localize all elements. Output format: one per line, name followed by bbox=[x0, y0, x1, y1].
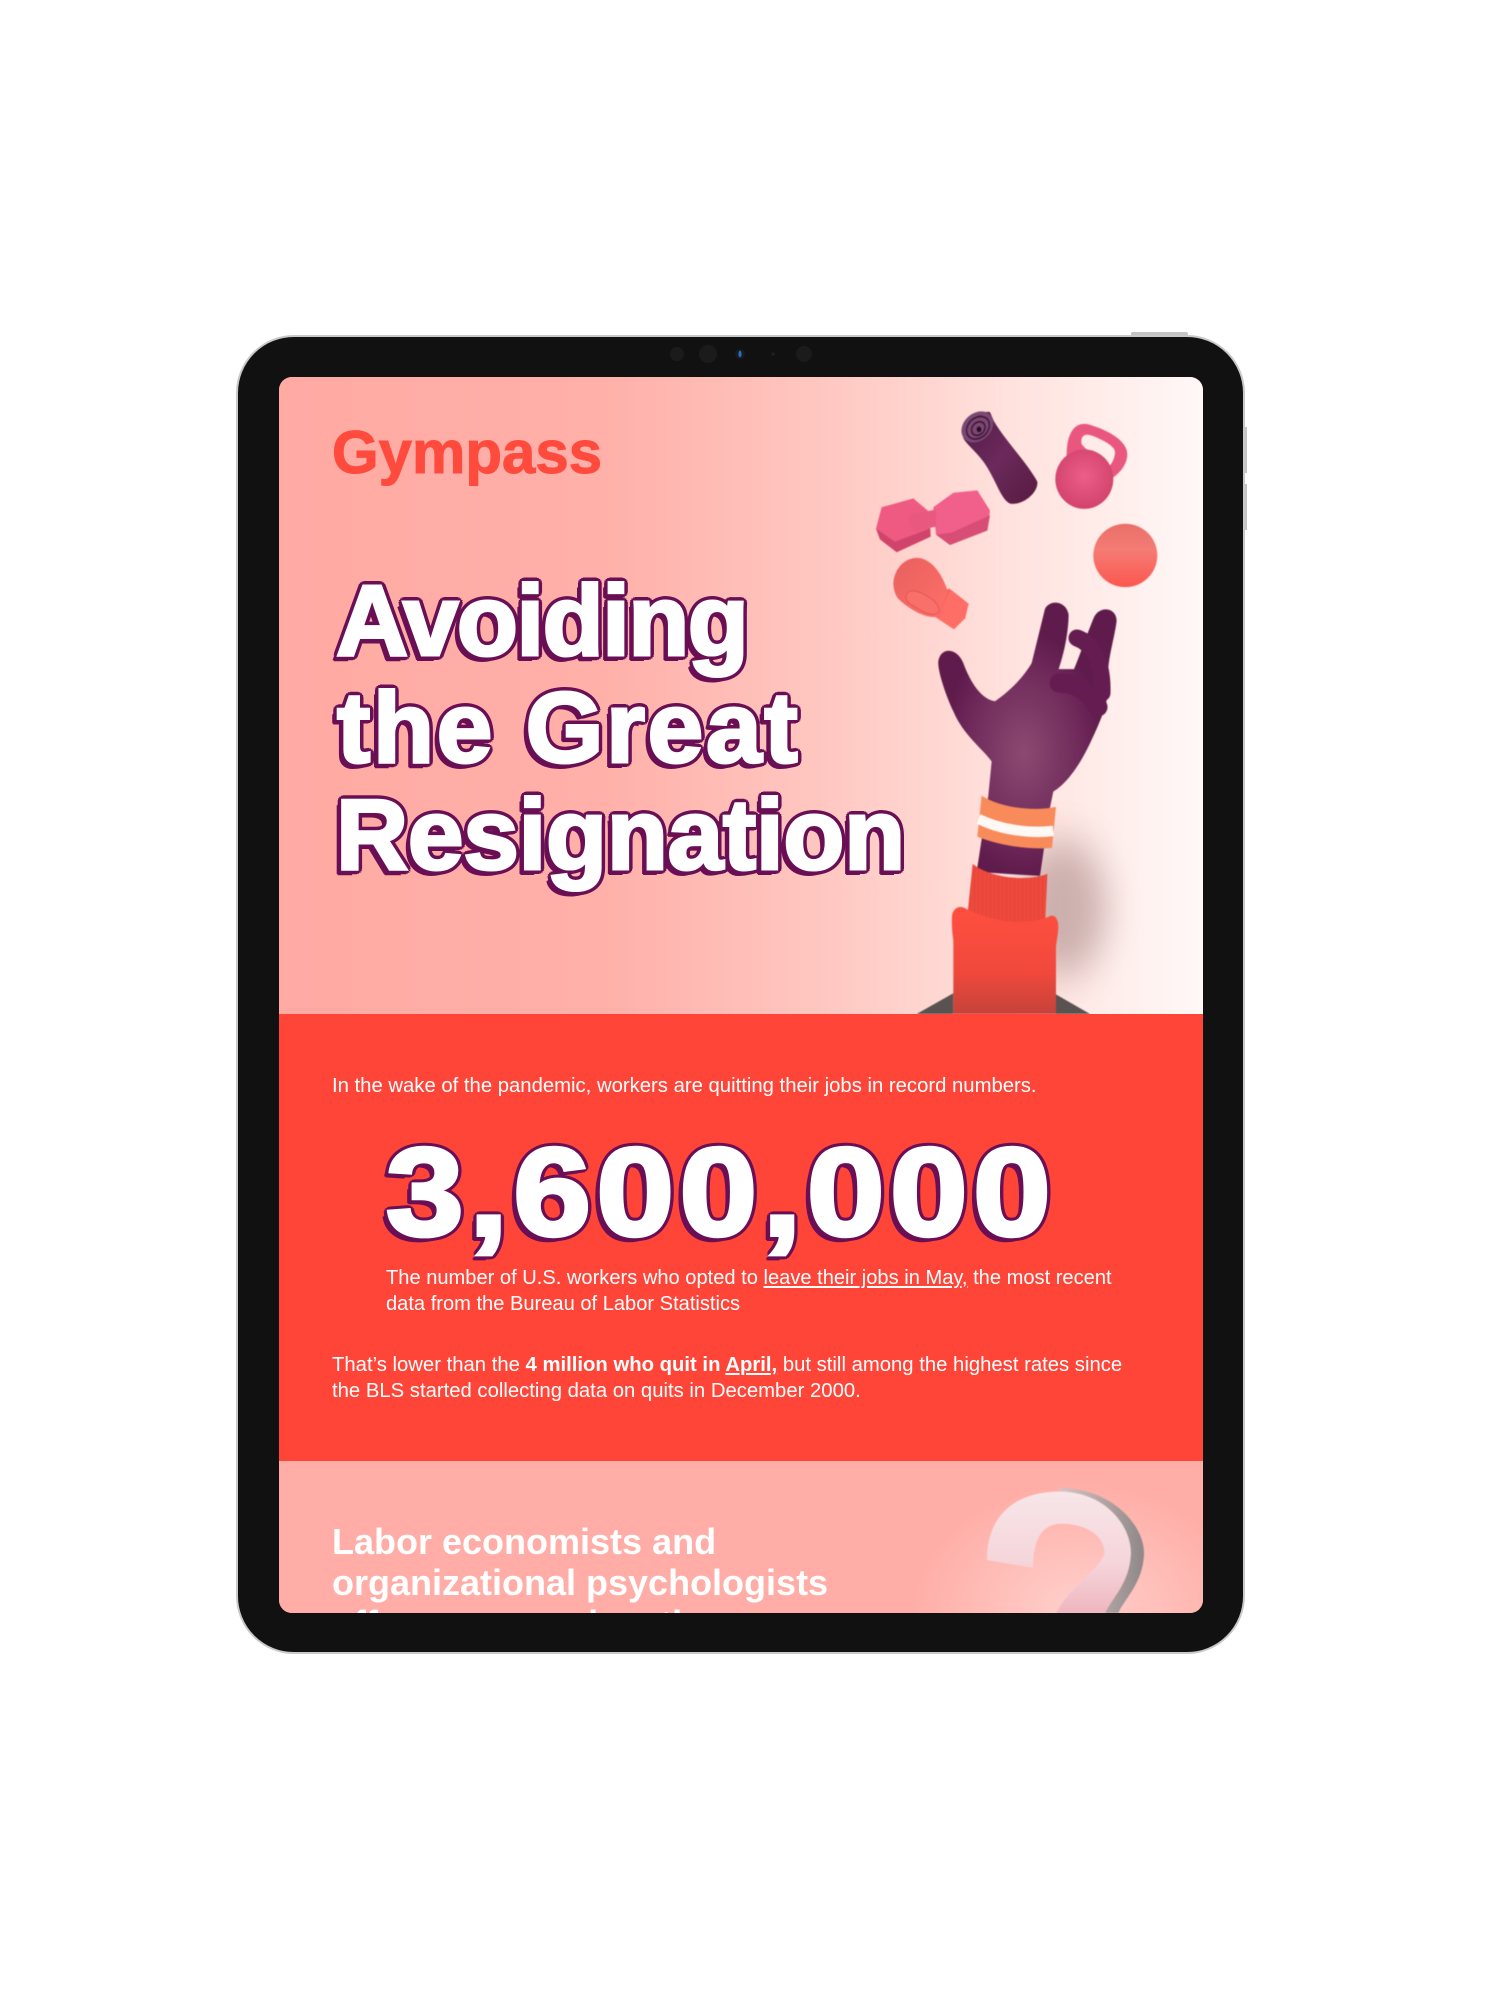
logo: Gympass: Gympass bbox=[332, 419, 602, 486]
text: intro sentence: In the wake of the pandemic, workers are quitting their jobs in record numbers. bbox=[332, 1075, 1037, 1097]
icon: kettlebell bbox=[1055, 424, 1127, 509]
text: April comparison: That’s lower than the 4 million who quit in April, but still among the highest rates since bbox=[332, 1354, 1122, 1376]
icon: yoga mat bbox=[957, 405, 1037, 504]
icon: exercise ball bbox=[1093, 524, 1157, 587]
icon: soft shadow behind sleeve bbox=[1020, 840, 1107, 976]
title: Avoiding bbox=[336, 565, 747, 677]
text: number description bbox=[386, 1267, 1112, 1315]
text: number description: data from the Bureau of Labor Statistics bbox=[386, 1293, 740, 1315]
icon: 3D question mark bbox=[986, 1488, 1145, 1613]
icon: ribbed cuff bbox=[967, 864, 1047, 928]
icon: dumbbell bbox=[876, 490, 990, 552]
big number: 3,600,000 bbox=[386, 1123, 1056, 1262]
tablet screen bbox=[279, 377, 1203, 1613]
text: April comparison bbox=[332, 1354, 1122, 1402]
title bbox=[332, 565, 905, 896]
panel: red statistics section bbox=[279, 1014, 1203, 1461]
panel: hero background bbox=[279, 377, 1203, 1014]
title: Resignation bbox=[336, 779, 905, 891]
text: number description: The number of U.S. workers who opted to leave their jobs in May, the most recent bbox=[386, 1267, 1112, 1289]
text: April comparison: the BLS started collecting data on quits in December 2000. bbox=[332, 1380, 861, 1402]
icon: sleeve collar bbox=[952, 907, 1058, 1016]
title: the Great bbox=[337, 672, 800, 784]
tablet top button bbox=[1131, 332, 1188, 336]
icon: curled fingers bbox=[1059, 638, 1102, 707]
tablet frame bbox=[236, 335, 1245, 1654]
heading: labor economists bbox=[332, 1521, 828, 1613]
tablet side button lower bbox=[1245, 484, 1247, 530]
icon: wristband bbox=[977, 796, 1056, 848]
heading: labor economists: organizational psychologists bbox=[332, 1562, 828, 1603]
icon: boxing glove bbox=[893, 558, 969, 629]
tablet side button upper bbox=[1245, 427, 1247, 473]
heading: labor economists: Labor economists and bbox=[332, 1521, 716, 1562]
icon: hand bbox=[938, 603, 1117, 876]
panel: lower section background bbox=[279, 1461, 1203, 1613]
tablet camera array bbox=[670, 345, 812, 363]
illustration: hand juggling fitness equipment bbox=[876, 410, 1158, 1014]
icon: neck base bbox=[915, 993, 1092, 1015]
